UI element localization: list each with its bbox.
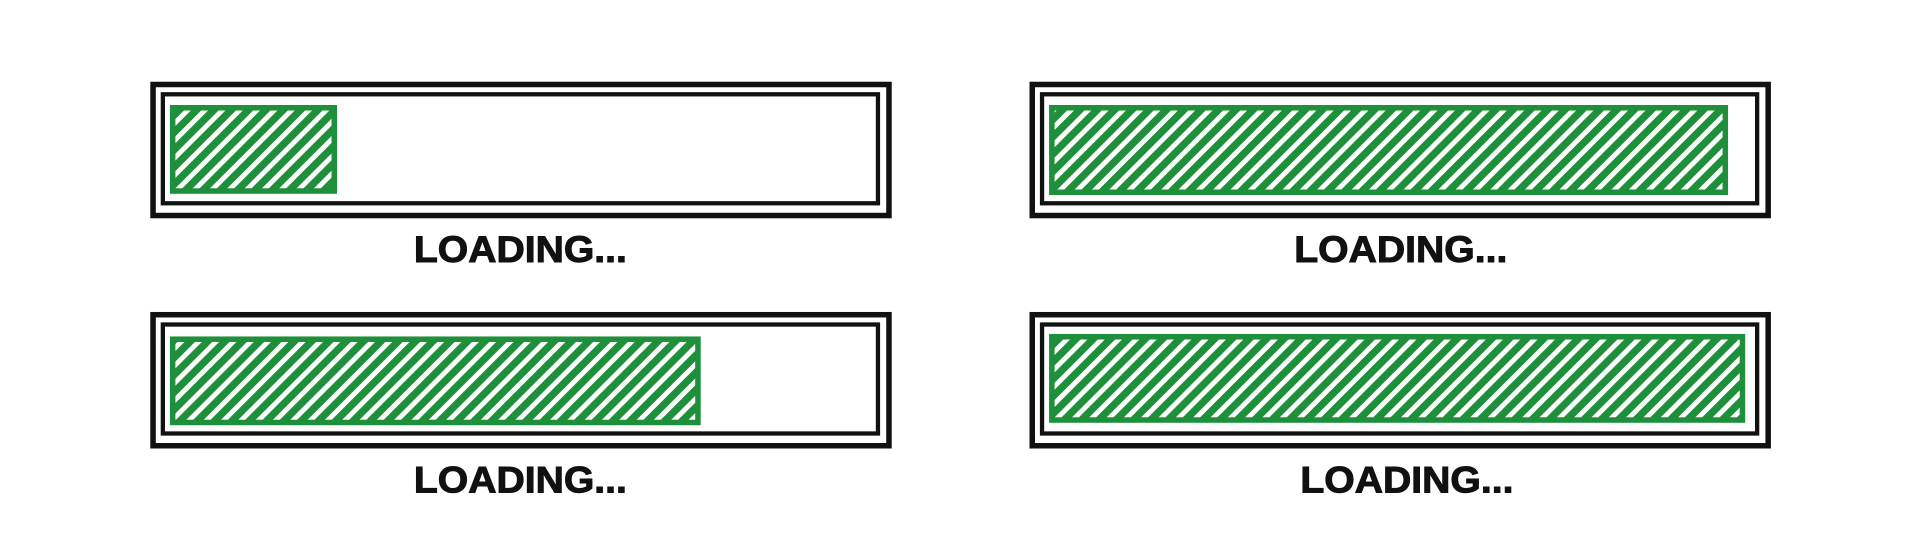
label top-right: LOADING... (1294, 229, 1507, 270)
panel: loading bar bottom-left (153, 315, 889, 446)
panel: loading bar bottom-right (1032, 315, 1768, 446)
progress fill 97% (1052, 337, 1742, 420)
label bottom-left: LOADING... (414, 459, 627, 500)
label top-left: LOADING... (414, 229, 627, 270)
progress fill 72% (173, 339, 698, 422)
panel: loading bar top-right (1032, 84, 1768, 216)
progress fill 20% (173, 108, 334, 191)
progress fill 95% (1052, 108, 1725, 192)
panel: loading bar top-left (153, 84, 889, 216)
label bottom-right: LOADING... (1300, 459, 1513, 500)
